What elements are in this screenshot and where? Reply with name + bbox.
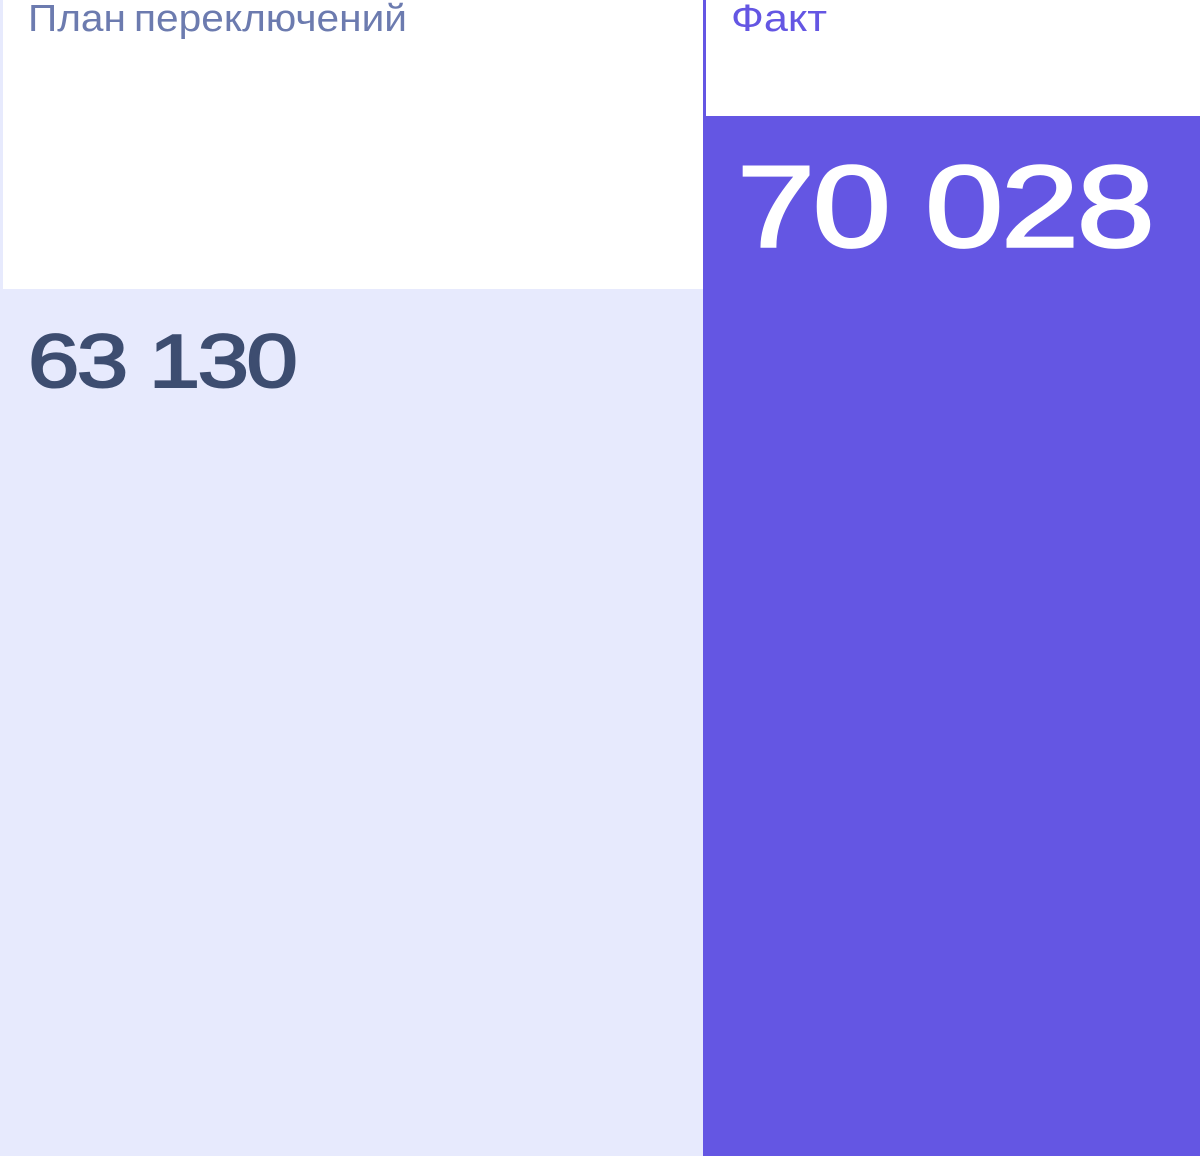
- actual column left edge line: [703, 0, 706, 116]
- plan column: [0, 0, 703, 1156]
- plan column left edge line: [0, 0, 3, 289]
- actual value: 70 028: [737, 142, 1152, 272]
- plan bar: [0, 289, 703, 1156]
- actual column: [703, 0, 1200, 1156]
- actual bar: [703, 116, 1200, 1156]
- plan value: 63 130: [28, 319, 295, 403]
